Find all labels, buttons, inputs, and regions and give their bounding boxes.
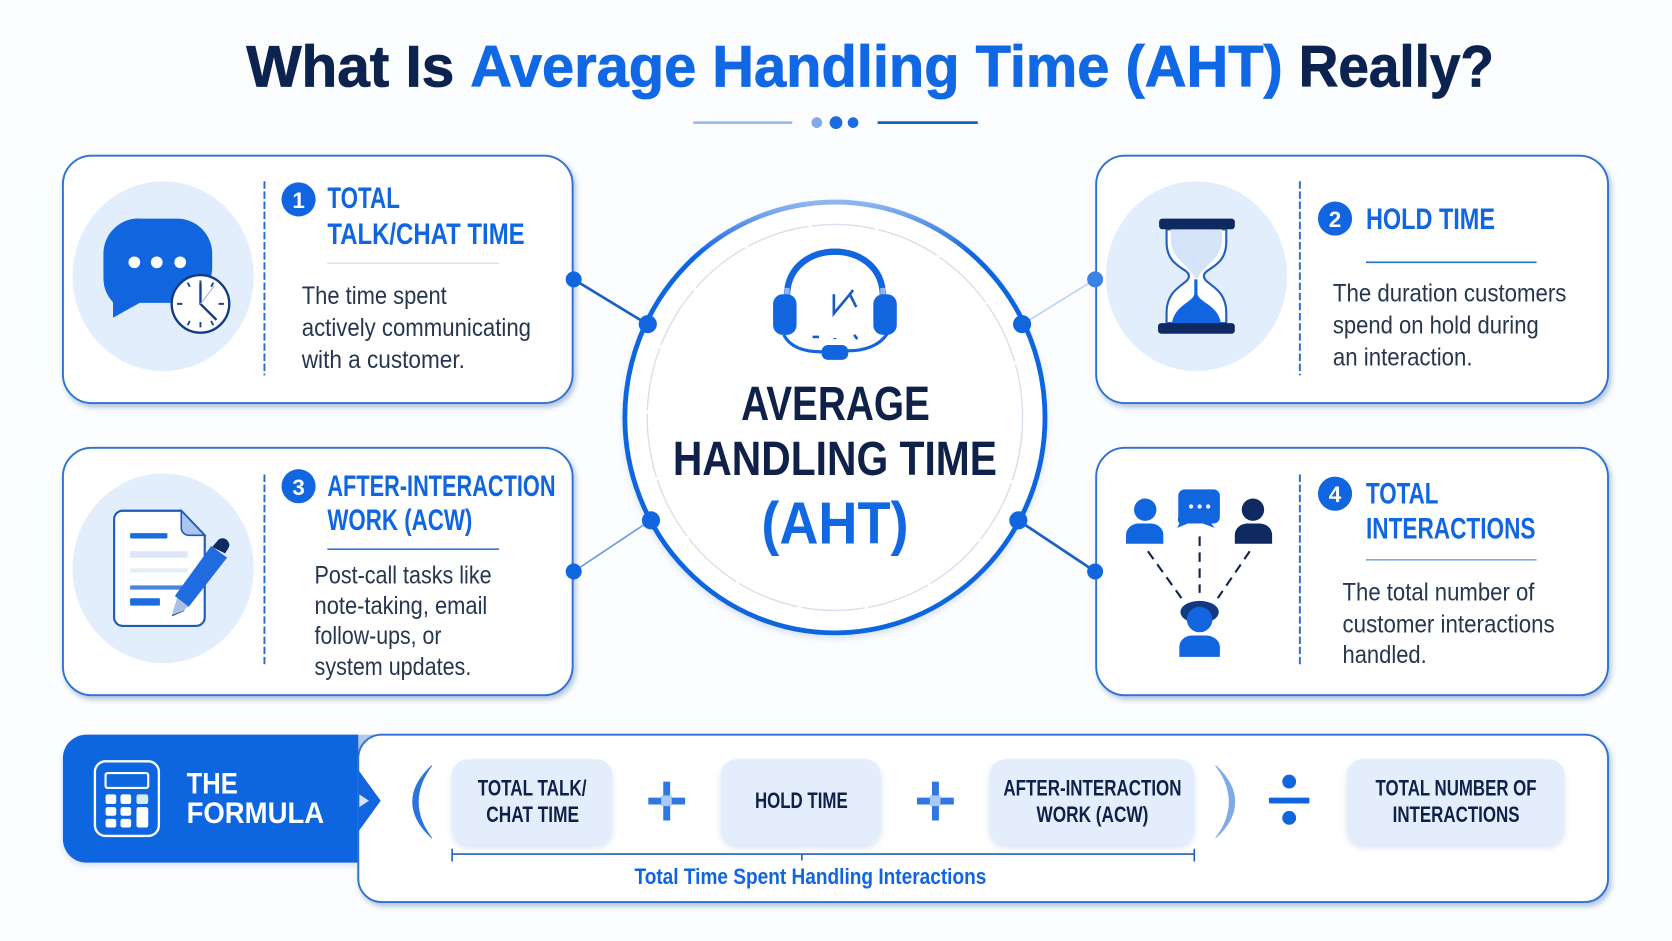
- description: [301, 283, 531, 374]
- panel: formula: [63, 735, 1608, 902]
- central circle: [625, 202, 1045, 633]
- center acronym: (AHT): [761, 489, 909, 556]
- icon: calculator: [95, 761, 159, 836]
- term: total talk/chat time: CHAT TIME: [486, 802, 579, 827]
- plus sign: [917, 782, 954, 821]
- title: What Is: [246, 34, 454, 99]
- connector node dots: [566, 271, 1103, 580]
- description: Post-call tasks like: [315, 562, 492, 589]
- number badge 4: 4: [1329, 482, 1342, 507]
- icon: people network: [1126, 489, 1272, 657]
- term: hold time: [721, 759, 881, 845]
- term: total talk/chat time: [452, 759, 612, 845]
- title divider: [693, 116, 978, 129]
- formula tab label: THE: [187, 767, 238, 800]
- title: [246, 34, 1494, 99]
- heading: [327, 470, 556, 537]
- formula body: [358, 735, 1608, 902]
- heading: TOTAL: [1366, 477, 1438, 510]
- description: with a customer.: [301, 347, 465, 374]
- number badge 4: [1318, 477, 1352, 511]
- division sign: [1269, 775, 1309, 825]
- heading: HOLD TIME: [1366, 203, 1495, 236]
- center heading: [673, 378, 997, 486]
- term: total number of interactions: [1347, 759, 1564, 845]
- close parenthesis: [1216, 766, 1235, 838]
- term: total number of interactions: INTERACTIONS: [1393, 802, 1520, 827]
- bracket label: Total Time Spent Handling Interactions: [634, 864, 986, 889]
- icon: chat bubble with clock: [73, 181, 254, 371]
- description: follow-ups, or: [315, 623, 441, 650]
- description: handled.: [1343, 642, 1427, 669]
- description: actively communicating: [302, 315, 531, 342]
- number badge 3: [282, 469, 316, 503]
- description: [315, 562, 492, 681]
- number badge 2: 2: [1329, 207, 1341, 232]
- icon: document and pen: [73, 473, 254, 663]
- icon: headset: [773, 252, 897, 360]
- icon: hourglass: [1106, 181, 1287, 371]
- title: Really?: [1299, 34, 1494, 99]
- term: total number of interactions: TOTAL NUMBER OF: [1376, 775, 1537, 800]
- number badge 1: 1: [292, 188, 305, 213]
- title: Average Handling Time (AHT): [470, 34, 1283, 99]
- formula tab label: [187, 767, 324, 830]
- number badge 1: [282, 182, 316, 216]
- open parenthesis: [413, 766, 432, 838]
- number badge 2: [1318, 202, 1352, 236]
- description: The duration customers: [1333, 281, 1566, 308]
- description: [1343, 579, 1555, 669]
- description: spend on hold during: [1333, 313, 1539, 340]
- heading: WORK (ACW): [327, 504, 472, 537]
- panel: hold time: [1096, 156, 1608, 403]
- connector lines: [574, 279, 1095, 572]
- description: [1333, 281, 1566, 372]
- number badge 3: 3: [292, 475, 305, 500]
- heading: TOTAL: [327, 182, 400, 215]
- heading: TALK/CHAT TIME: [327, 218, 525, 251]
- panel: total interactions: [1096, 448, 1608, 695]
- formula label tab: [63, 735, 381, 863]
- panel: after-interaction work: [63, 448, 573, 695]
- heading: AFTER-INTERACTION: [327, 470, 556, 503]
- panel: total talk/chat time: [63, 156, 573, 403]
- term: hold time: HOLD TIME: [755, 788, 848, 813]
- center heading: AVERAGE: [741, 378, 930, 431]
- description: The time spent: [302, 283, 447, 310]
- description: note-taking, email: [315, 593, 487, 620]
- term: total talk/chat time: TOTAL TALK/: [478, 775, 586, 800]
- heading: INTERACTIONS: [1366, 512, 1536, 545]
- term: after-interaction work: [990, 759, 1194, 845]
- description: customer interactions: [1343, 611, 1555, 638]
- center heading: HANDLING TIME: [673, 433, 997, 486]
- bracket: [452, 849, 1194, 862]
- description: an interaction.: [1333, 345, 1473, 372]
- formula tab label: FORMULA: [187, 797, 324, 830]
- heading: [327, 182, 525, 251]
- description: system updates.: [315, 654, 471, 681]
- term: after-interaction work: WORK (ACW): [1036, 802, 1148, 827]
- heading: [1366, 477, 1536, 545]
- plus sign: [648, 782, 685, 821]
- term: after-interaction work: AFTER-INTERACTION: [1003, 775, 1181, 800]
- description: The total number of: [1343, 579, 1535, 606]
